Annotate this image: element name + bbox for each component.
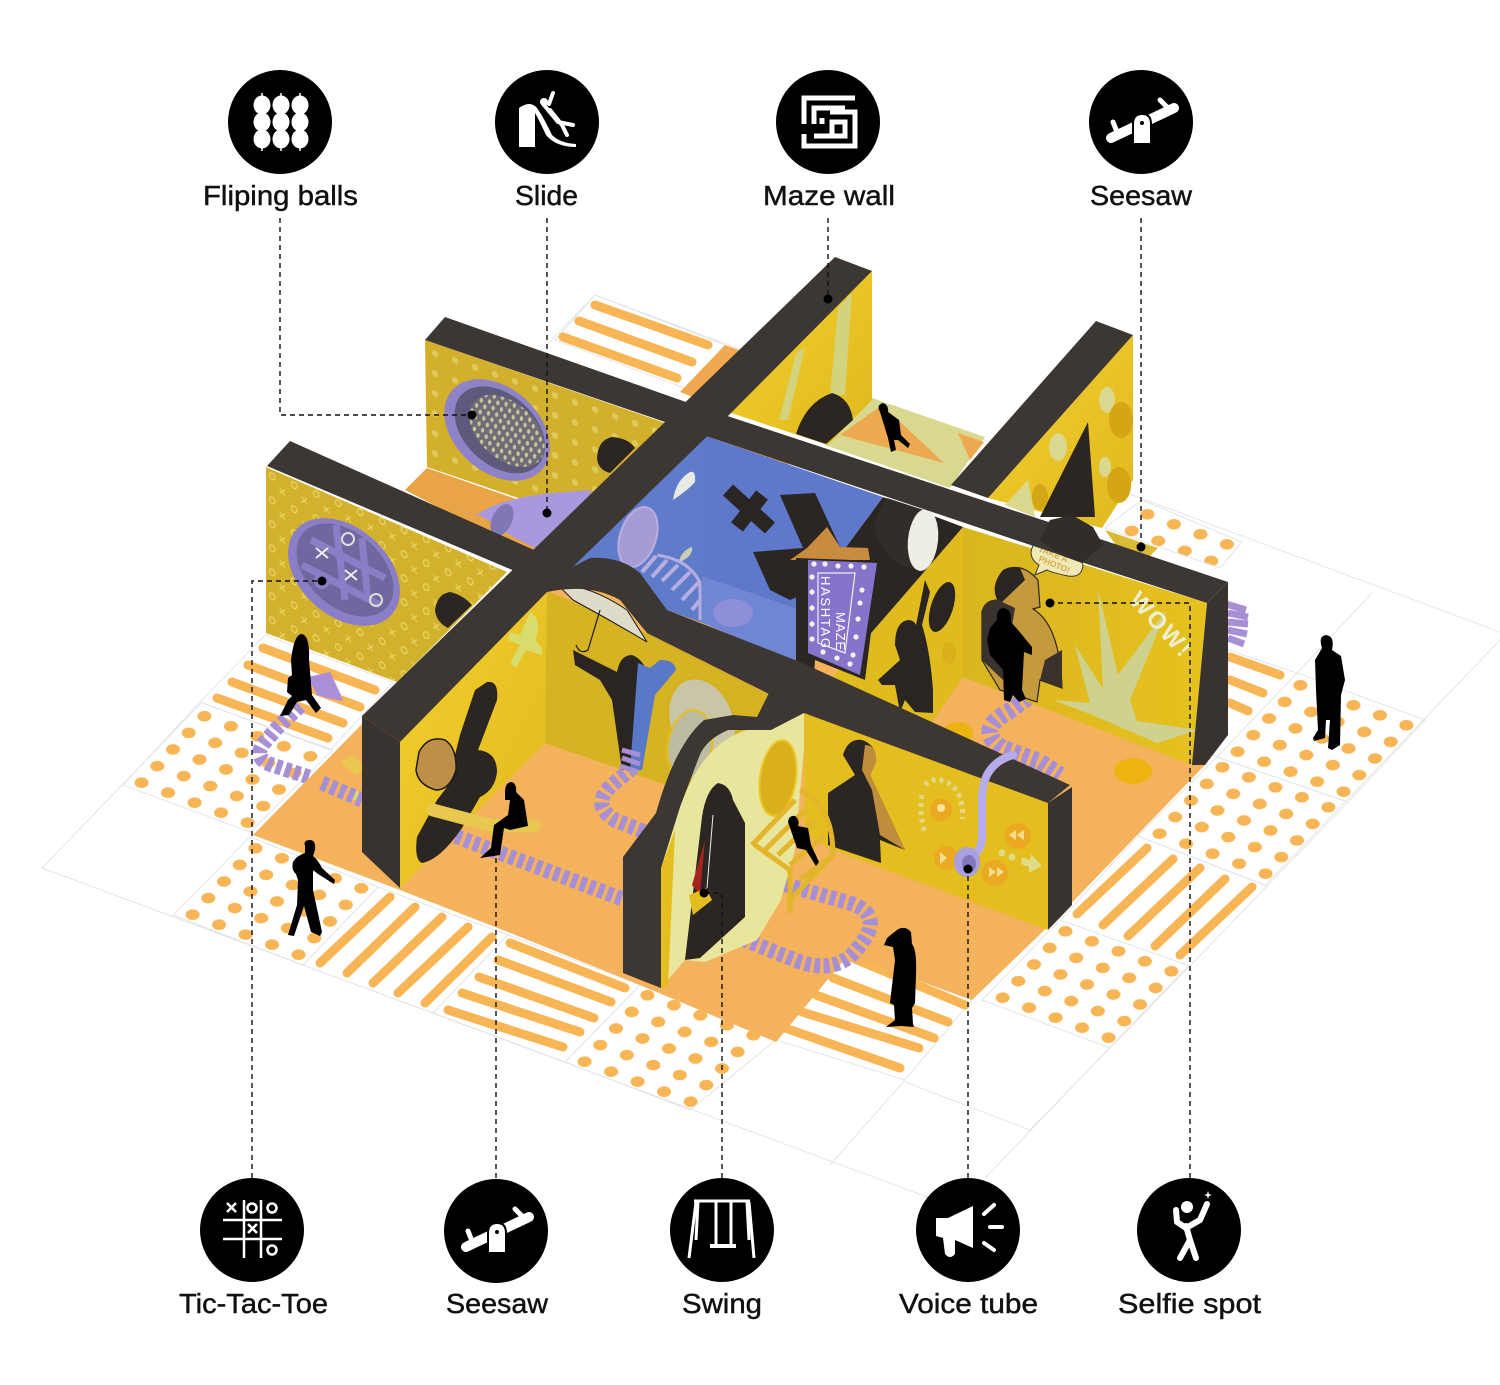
tube and stairs: [611, 502, 700, 620]
court floor behind tic-tac-toe wall: [405, 468, 620, 560]
cross balloon shape: [508, 612, 542, 668]
umbrella figure cut-out: [557, 584, 676, 770]
label: tic-tac-toe: Tic-Tac-Toe: [179, 1288, 328, 1319]
leader line: fliping balls: [280, 218, 476, 420]
keyhole door: [828, 740, 905, 863]
round slide opening: [657, 669, 747, 783]
umbrella: [557, 584, 647, 642]
yellow sliver: [661, 830, 675, 988]
label: seesaw bottom: Seesaw: [446, 1288, 549, 1319]
arrow: [998, 850, 1042, 873]
person: runner: [879, 403, 910, 452]
icon: voice tube: [916, 1178, 1020, 1282]
clouds: [673, 472, 695, 500]
arch dark top: [623, 693, 804, 988]
yellow ladder: [752, 790, 833, 913]
person: man with camera: [884, 928, 916, 1027]
speech bubble: TAKE A: [1037, 544, 1069, 564]
hashtag maze sign: MAZE: [833, 612, 848, 650]
people silhouettes: [280, 403, 1345, 1027]
orange strip behind back wall: [680, 345, 745, 400]
rewind button: [1005, 823, 1031, 849]
blue room: [560, 435, 963, 664]
tile: far right dots: [1217, 673, 1425, 802]
back court floor: [825, 398, 985, 488]
purple path through the arch: [690, 878, 870, 966]
purple path fan behind right wall: [1226, 604, 1248, 644]
purple path loop by the slide: [602, 762, 650, 834]
flag on left stripes: [308, 672, 343, 701]
stairs in door: [620, 750, 640, 772]
person: seated at selfie door: [987, 608, 1032, 702]
band: right back wall top: [951, 321, 1133, 498]
tile: left stripes: [200, 635, 393, 750]
leader line: selfie spot: [1046, 598, 1190, 1178]
band: front-left main diagonal wall top: [362, 257, 872, 742]
hashtag maze sign: HASHTAG: [818, 576, 833, 648]
cross door cut-out: [416, 682, 497, 863]
band: back long wall top: [425, 317, 1228, 603]
door in fliping balls wall: [597, 437, 635, 473]
swing seat and red wall: [689, 815, 713, 915]
leader line: maze wall: [824, 218, 832, 304]
wall face: selfie wall: [963, 527, 1207, 765]
drum with pale end: [875, 498, 941, 575]
person: walking man: [288, 840, 335, 936]
tile: top stripes: [555, 295, 725, 390]
person: walking woman: [280, 634, 321, 716]
slide: [447, 490, 592, 560]
voice tube: [954, 755, 1013, 877]
lower left room back wall: [545, 584, 770, 821]
burst graphic: [1053, 589, 1198, 743]
tic-tac-toe window: [267, 496, 421, 648]
person: standing man right: [1313, 635, 1345, 750]
icon: tic-tac-toe: [200, 1178, 304, 1282]
tile: far right stripes: [1205, 650, 1297, 757]
tile: right stripes: [1060, 836, 1267, 966]
balloon girl silhouette: [878, 580, 933, 713]
yellow wall beside sign: [833, 527, 963, 725]
band: tic-tac-toe wall top: [267, 441, 552, 572]
tile: top right dots: [1105, 500, 1242, 568]
purple path on left tiles: [260, 706, 355, 800]
icon: swing: [670, 1178, 774, 1282]
tan opening: [416, 739, 456, 790]
leader line: voice tube: [964, 864, 972, 1178]
tile: right-bottom dots: [982, 920, 1190, 1048]
icon: maze wall: [776, 70, 880, 174]
label: swing: Swing: [682, 1288, 762, 1319]
label: slide: Slide: [515, 180, 578, 211]
leader line: seesaw top: [1136, 218, 1146, 552]
small bump: [942, 642, 956, 664]
hashtag maze sign: [796, 558, 880, 690]
ground grid lines: [42, 295, 1500, 1198]
leader line: seesaw bottom: [495, 850, 497, 1178]
voice tube wall end: [1048, 787, 1072, 930]
label: maze wall: Maze wall: [763, 180, 895, 211]
label: selfie spot: Selfie spot: [1118, 1288, 1261, 1319]
tile: right dots: [1138, 757, 1348, 886]
purple path in right room: [990, 692, 1060, 775]
front-left wall end: [362, 716, 400, 888]
bump on back wall top: [1040, 515, 1103, 563]
icon: selfie spot: [1137, 1178, 1241, 1282]
tile: bottom dots: [565, 985, 776, 1110]
leader line: tic-tac-toe: [252, 576, 326, 1178]
person: on seesaw: [480, 782, 528, 858]
pale arch face: [661, 713, 804, 988]
wall face: right back wall with domes: [988, 335, 1133, 528]
icon: seesaw bottom: [444, 1179, 548, 1283]
purple path in lower left room: [322, 783, 625, 900]
tile: left dots: [123, 702, 333, 832]
dark void behind sign: [800, 497, 963, 640]
icon: seesaw top: [1089, 70, 1193, 174]
door in tic-tac-toe wall: [435, 592, 472, 628]
floor tiles: [123, 295, 1425, 1110]
small seesaw behind the back wall: [1105, 530, 1158, 558]
wall face: fliping balls wall: [424, 340, 700, 560]
label: fliping balls: Fliping balls: [203, 180, 358, 211]
tile: bottom-left dots: [173, 837, 378, 965]
speech bubble: [1031, 538, 1083, 576]
forward button: [982, 860, 1008, 886]
fliping balls window: [424, 359, 570, 501]
yellow dome behind lower wall: [943, 722, 973, 744]
person: kid on ladder: [788, 816, 819, 866]
door in back wall: [796, 393, 853, 444]
seesaw far end on the left floor: [340, 755, 366, 800]
purple dome: [713, 599, 753, 627]
tile: bottom stripes: [433, 935, 640, 1062]
x cut-out: [728, 490, 770, 528]
wall face: tic-tac-toe wall: [266, 467, 507, 682]
icon: fliping balls: [228, 70, 332, 174]
wow text: WOW!: [1124, 587, 1197, 662]
tile: bottom-left stripes: [303, 887, 508, 1013]
round hole: [924, 579, 960, 635]
orange floor: [253, 400, 1205, 1042]
tile: bottom-right stripes: [776, 955, 972, 1080]
play pause button: [934, 846, 958, 870]
icon: slide: [495, 70, 599, 174]
leader line: slide: [542, 218, 552, 518]
selfie door: [982, 568, 1062, 702]
wall face: front-left wall with seesaw door: [400, 590, 547, 888]
label: seesaw top: Seesaw: [1090, 180, 1193, 211]
label: voice tube: Voice tube: [899, 1288, 1038, 1319]
yellow dome on floor: [1114, 758, 1152, 784]
bulb button: [921, 780, 963, 833]
wall face: back maze wall: [728, 271, 872, 445]
swing door cut-out: [685, 783, 745, 960]
swing arch wall: [623, 693, 833, 988]
speech bubble: PHOTO!: [1037, 554, 1072, 575]
stairs oval: [755, 738, 801, 818]
wall face: voice tube wall: [804, 713, 1048, 930]
band: long central wall top: [547, 558, 1070, 803]
selfie wall end: [1192, 582, 1228, 765]
seesaw beam: [433, 810, 534, 826]
star cut-out: [753, 493, 883, 600]
leader line: swing: [700, 888, 722, 1178]
